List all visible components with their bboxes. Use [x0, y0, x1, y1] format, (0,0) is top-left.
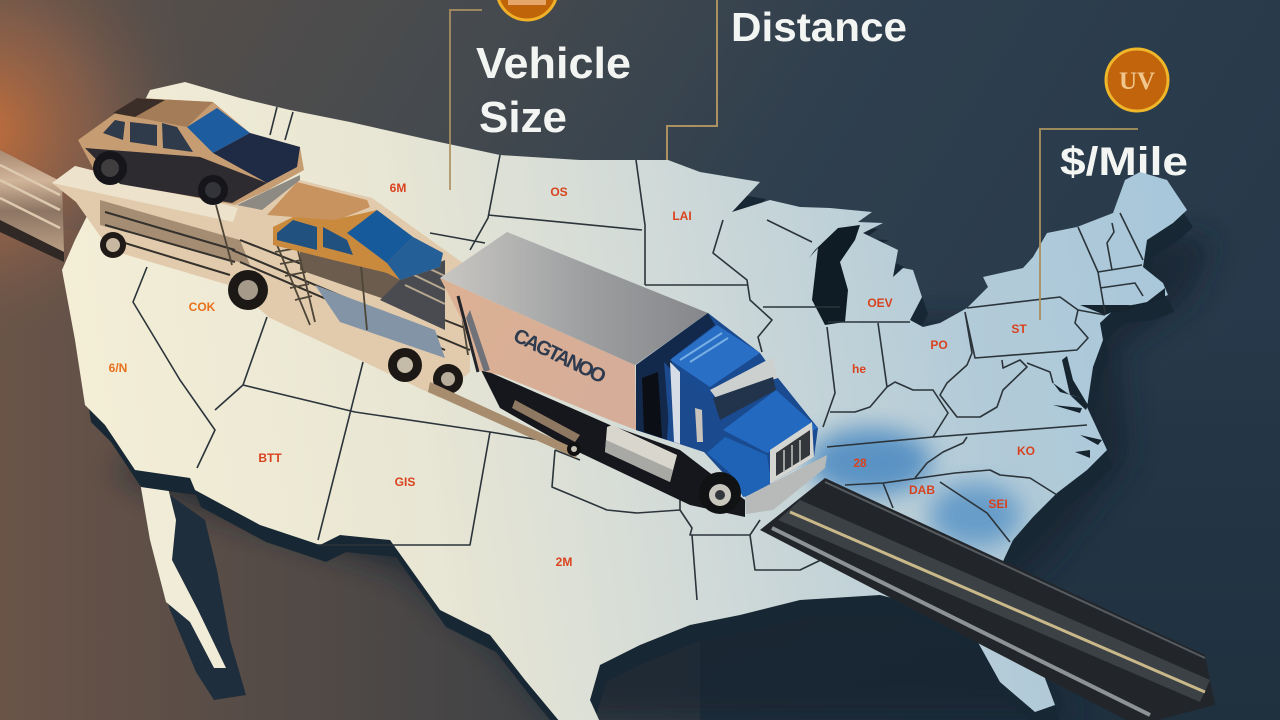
- car carrier trailer: [52, 166, 470, 398]
- trailer ladder: [216, 205, 468, 355]
- box trailer roof: [440, 232, 708, 365]
- map of United States: [62, 82, 1187, 720]
- state abbreviation labels: OEV: [867, 296, 893, 310]
- state abbreviation labels: he: [852, 362, 866, 376]
- car on top deck: [78, 98, 304, 210]
- heading: Distance: Distance: [731, 4, 907, 50]
- heading: Vehicle Size: [476, 39, 631, 142]
- state borders: [133, 107, 1143, 600]
- state abbreviation labels: BTT: [258, 451, 282, 465]
- baja peninsula: [140, 482, 246, 700]
- state abbreviation labels: 2M: [556, 555, 572, 569]
- state abbreviation labels: COK: [189, 300, 216, 314]
- state abbreviation labels: 6/N: [109, 361, 127, 375]
- box trailer side with lettering: CAGTANOO: [510, 325, 609, 388]
- trailer wheels: [100, 232, 463, 394]
- soft map shadow: [110, 230, 1215, 720]
- heading: $/Mile: $/Mile: [1060, 140, 1188, 184]
- semi truck: [428, 232, 827, 517]
- map extrusion: [68, 99, 1193, 720]
- highway to the right: [760, 478, 1215, 720]
- state abbreviation labels: 28: [853, 456, 867, 470]
- great lakes: [809, 225, 860, 325]
- car on lower deck: [267, 182, 443, 280]
- state abbreviation labels: GIS: [395, 475, 415, 489]
- connector: cost per mile: [1040, 129, 1138, 320]
- state abbreviation labels: [109, 181, 1035, 569]
- box trailer side with lettering: [440, 278, 636, 430]
- state abbreviation labels: DAB: [909, 483, 935, 497]
- truck cab: [636, 313, 827, 514]
- truck undercarriage: [428, 368, 745, 517]
- connector: distance: [667, 0, 717, 160]
- fuel tank: [605, 425, 677, 482]
- state abbreviation labels: KO: [1017, 444, 1035, 458]
- state abbreviation labels: 6M: [390, 181, 406, 195]
- connector: vehicle size: [450, 10, 482, 190]
- coin icon: cost per mile: [1106, 49, 1168, 111]
- state abbreviation labels: OS: [550, 185, 568, 199]
- coin icon: cost per mile: UV: [1119, 68, 1155, 95]
- coin icon: vehicle size: [497, 0, 557, 20]
- highway to the left: [0, 150, 64, 262]
- state abbreviation labels: LAI: [672, 209, 692, 223]
- heading: Vehicle Size: Size: [479, 93, 567, 142]
- state abbreviation labels: ST: [1011, 322, 1027, 336]
- state abbreviation labels: SEI: [988, 497, 1008, 511]
- heading: Vehicle Size: Vehicle: [476, 39, 631, 88]
- chesapeake bay and inlets: [1053, 288, 1165, 458]
- state abbreviation labels: PO: [930, 338, 948, 352]
